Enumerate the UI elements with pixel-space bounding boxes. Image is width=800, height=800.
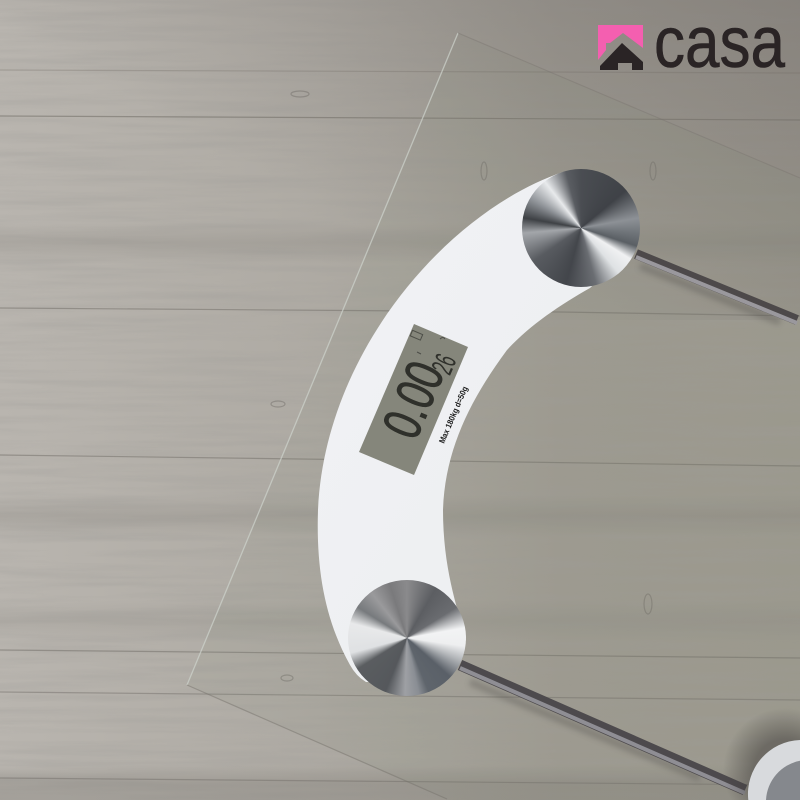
glass platform xyxy=(187,33,800,800)
logo: casa xyxy=(598,3,786,83)
brushed metal disc: bottom xyxy=(348,580,466,696)
logo icon: pink square xyxy=(598,25,643,60)
white curved display panel xyxy=(318,172,630,682)
LCD temperature reading: 26 xyxy=(426,350,463,379)
brushed metal disc: top xyxy=(522,169,640,287)
logo icon: house xyxy=(600,43,643,70)
rear foot: bottom right xyxy=(722,708,800,800)
capacity label: Max 180kg d=50g xyxy=(437,385,470,445)
rod shadows xyxy=(470,266,780,778)
wood knots xyxy=(271,91,656,681)
LCD status icons xyxy=(410,330,445,354)
LCD display xyxy=(359,324,468,475)
LCD weight reading: 0.00 xyxy=(371,353,456,447)
metal rod: lower xyxy=(460,665,745,793)
metal rod: upper xyxy=(636,254,797,323)
